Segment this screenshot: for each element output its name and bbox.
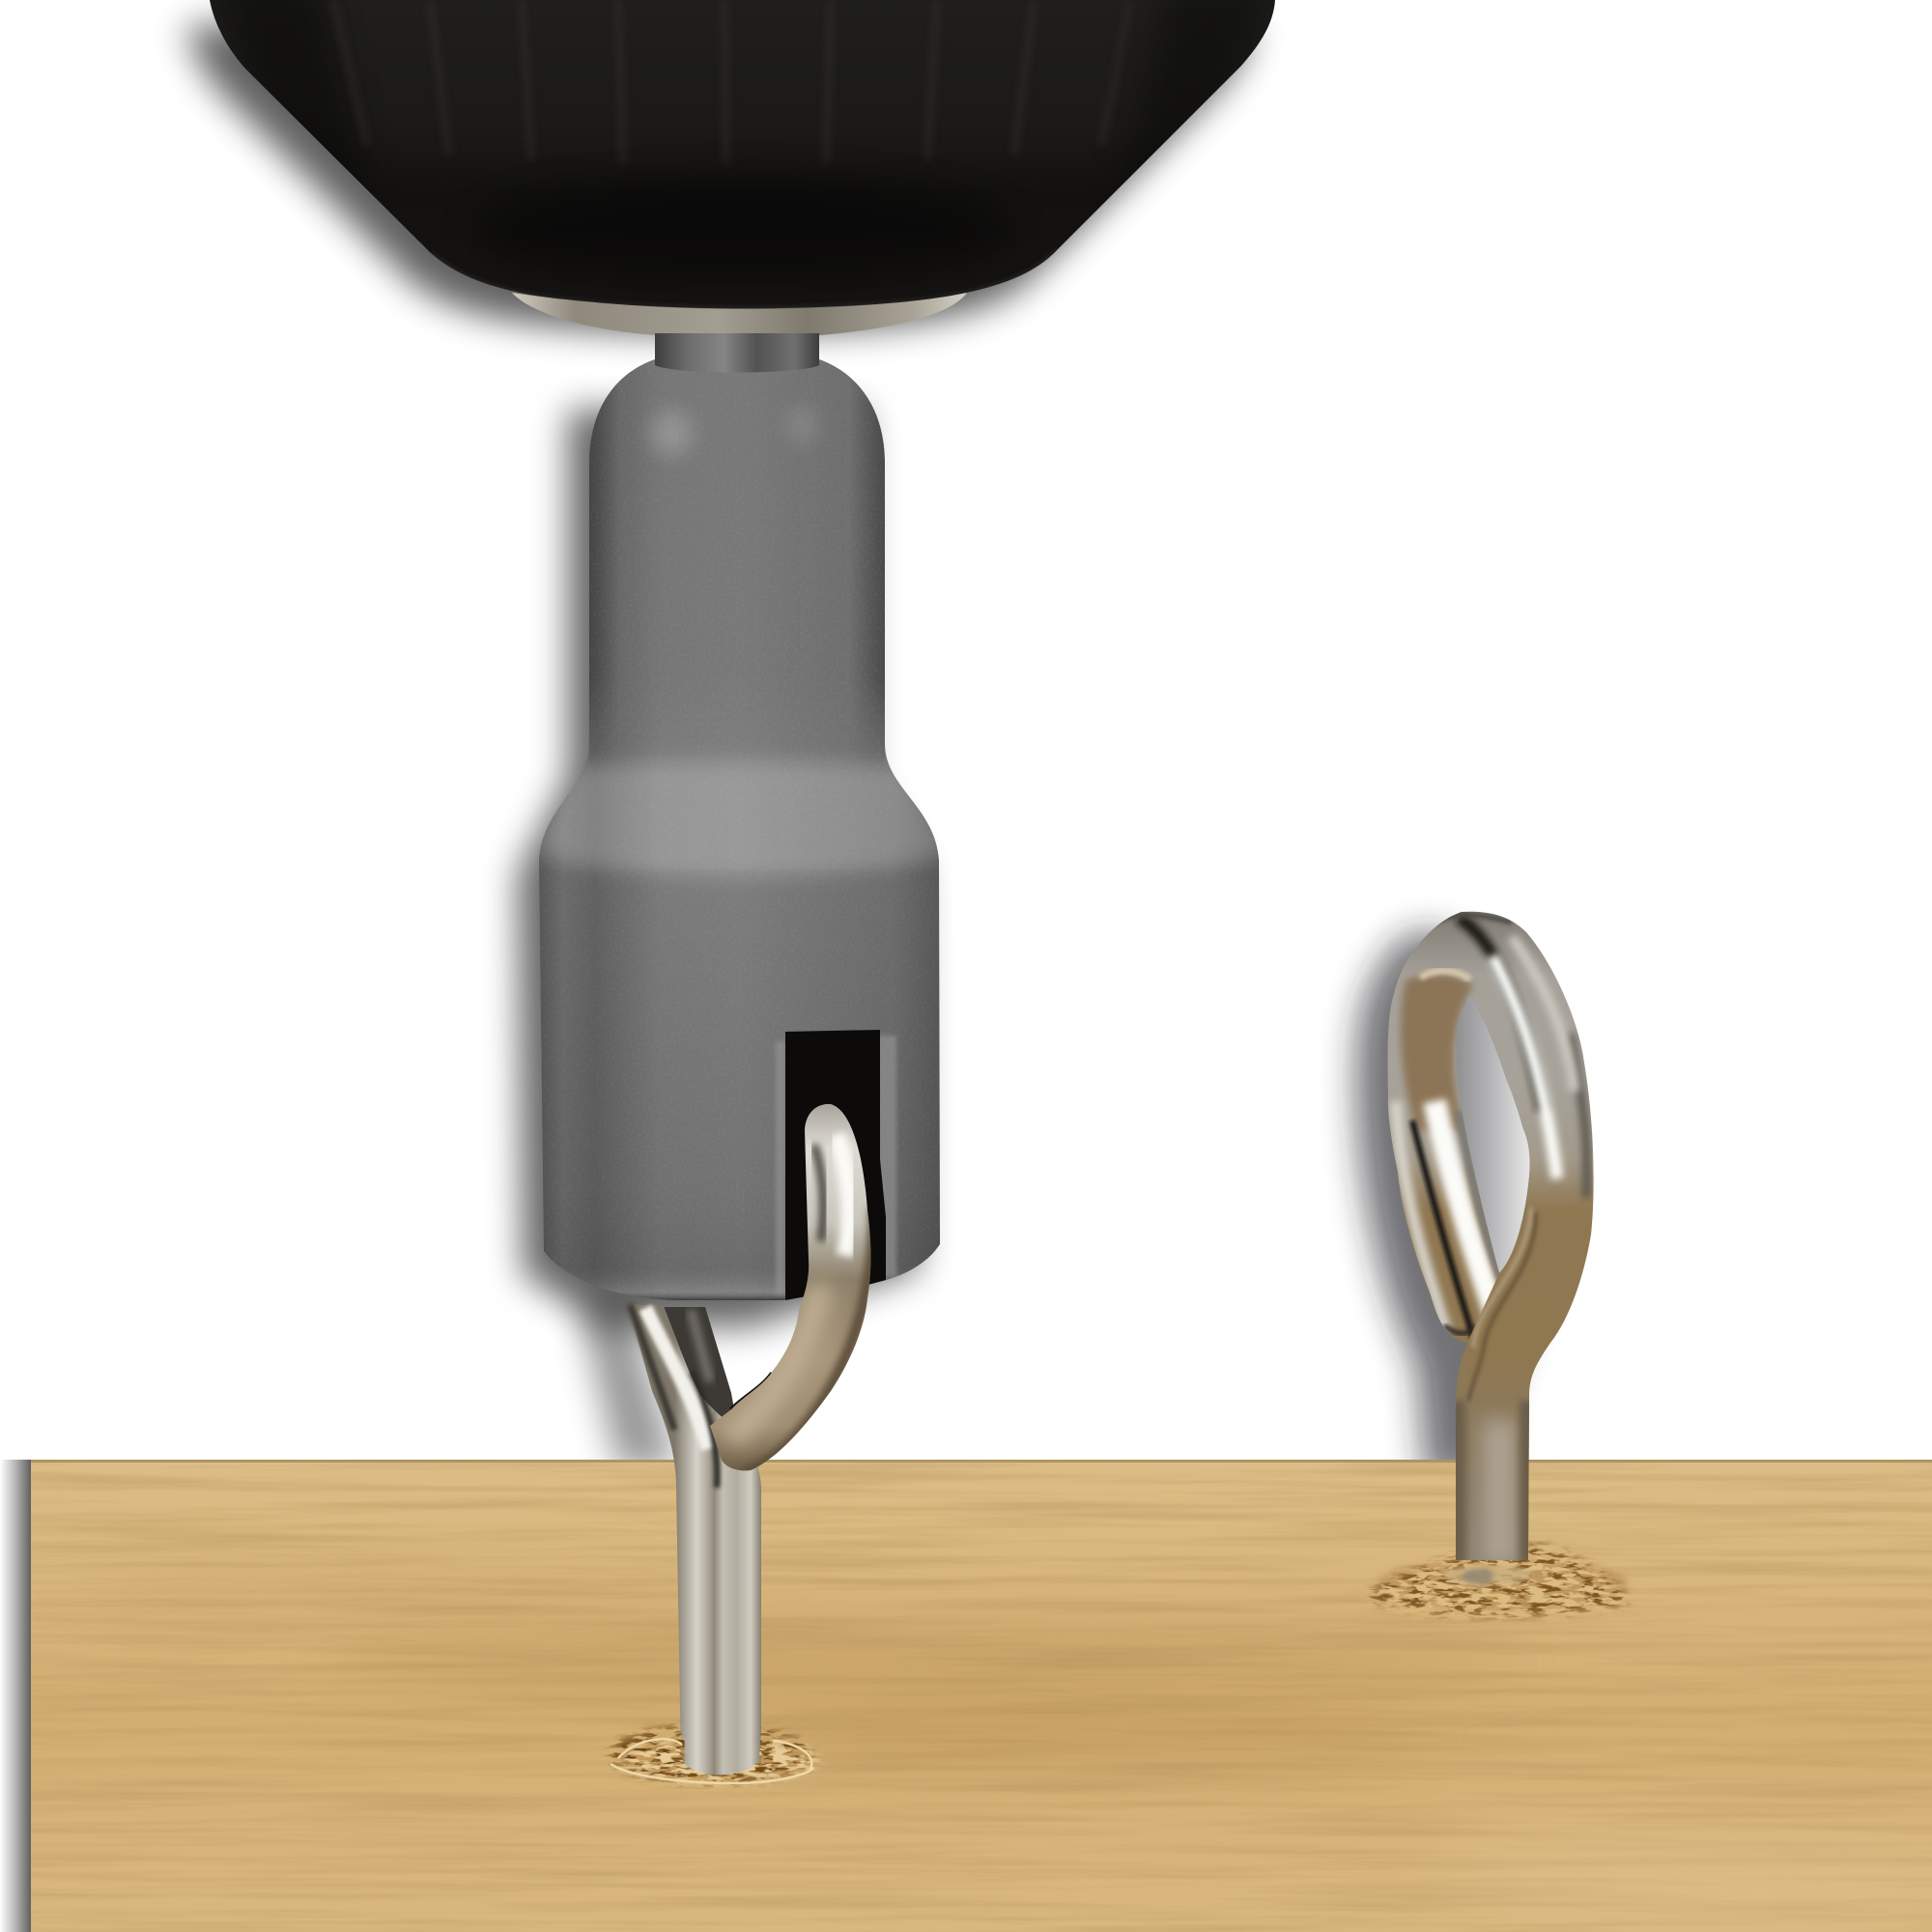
chuck silver washer: [512, 293, 967, 335]
cast shadow of chuck: [186, 25, 1252, 333]
driver shaft collar: [655, 333, 819, 373]
hook held in bit: curved eye: [710, 1104, 874, 1473]
installed eye hook: [1388, 912, 1594, 1565]
shavings covering right hook base: [1443, 1564, 1532, 1585]
wood shavings around left hole: [610, 1725, 820, 1783]
cast shadow of installed eye hook: [1356, 931, 1551, 1482]
cast shadow of hook under the bit: [580, 1304, 676, 1468]
hook held in bit: stem and left arm: [628, 1304, 761, 1765]
drill chuck: [210, 0, 1275, 308]
bit slot: [776, 1030, 896, 1300]
cast shadow of driver bit: [518, 410, 919, 1327]
wood shavings pile around right hook: [1364, 1544, 1631, 1616]
driver bit body: [529, 348, 952, 1314]
hook held in bit: rear arm: [664, 1307, 734, 1430]
stem base over left shavings: [684, 1719, 761, 1776]
wood board: [0, 1460, 1932, 1932]
